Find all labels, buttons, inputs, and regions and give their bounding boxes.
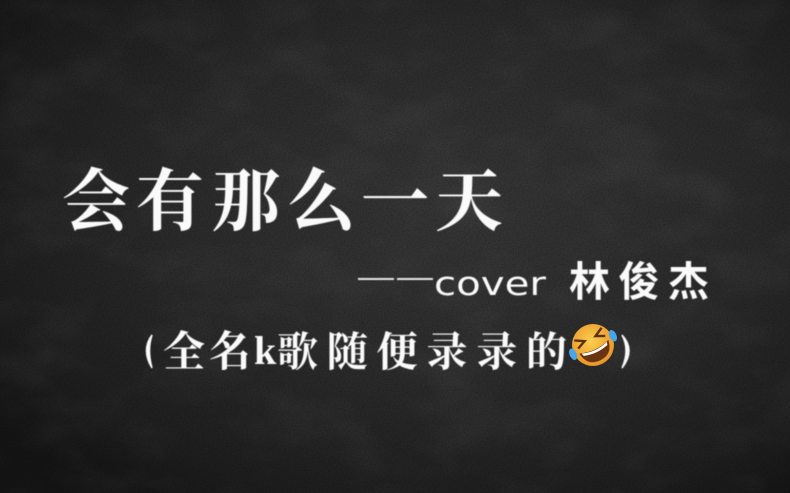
subtitle: cover credit: cover: [434, 264, 547, 303]
note line: 全名: [163, 329, 251, 376]
icon: rolling on the floor laughing emoji: [561, 315, 625, 375]
title: 么: [287, 164, 359, 240]
title: 会: [62, 164, 130, 240]
title: 一: [361, 164, 429, 240]
note line: k: [254, 328, 277, 373]
title: 天: [435, 164, 503, 240]
note line: [146, 328, 629, 376]
subtitle: cover credit: 林俊杰: [569, 248, 709, 308]
title: 那: [212, 164, 280, 240]
title: [62, 164, 503, 240]
note line: 歌随便录录的: [277, 329, 567, 375]
title: 有: [136, 164, 204, 240]
subtitle: cover credit: [358, 248, 709, 308]
